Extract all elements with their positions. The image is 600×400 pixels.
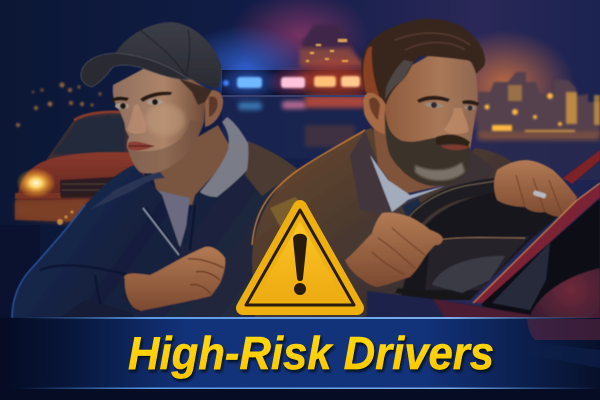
dark window area — [482, 200, 600, 318]
window frame top right — [563, 150, 600, 184]
steering wheel — [407, 186, 510, 232]
brows, eyes, nose, mouth — [111, 92, 172, 150]
title: High-Risk Drivers — [128, 327, 494, 379]
warning triangle — [243, 207, 357, 308]
ear — [205, 90, 223, 127]
hair — [178, 78, 212, 105]
bearded man driving — [252, 19, 530, 318]
city skyline, right — [478, 72, 600, 140]
door pillar — [473, 183, 600, 303]
orange rim light shoulder — [245, 141, 298, 196]
baseball cap brim — [81, 53, 190, 87]
exclamation mark — [293, 234, 307, 281]
jacket collar — [350, 130, 405, 220]
baseball cap dome — [115, 22, 221, 89]
hair — [362, 19, 485, 105]
brown jacket — [252, 128, 530, 318]
face — [385, 55, 478, 170]
red car with headlight — [15, 111, 150, 225]
lower hand on wheel — [345, 212, 443, 287]
title banner — [0, 317, 600, 400]
side mirror — [527, 268, 600, 340]
man in cap — [12, 22, 310, 318]
neck and t-shirt — [150, 125, 232, 205]
shirt — [370, 155, 445, 212]
gripping hand on wheel top — [494, 160, 577, 217]
neck — [372, 118, 465, 195]
dashboard — [425, 236, 530, 290]
bokeh lights, left — [16, 82, 102, 127]
face — [113, 60, 206, 174]
car interior and door — [345, 150, 600, 318]
badge on sleeve — [270, 197, 300, 230]
distant building behind police lights — [300, 25, 365, 66]
clenched fist and forearm — [124, 247, 225, 311]
beard — [385, 110, 470, 186]
dark void under wheel — [400, 192, 560, 300]
facial features — [417, 96, 479, 150]
ear — [363, 90, 386, 134]
door sill — [367, 291, 530, 318]
grey collar — [200, 117, 248, 197]
dark jacket — [12, 153, 310, 318]
police car with light bar — [214, 62, 375, 158]
